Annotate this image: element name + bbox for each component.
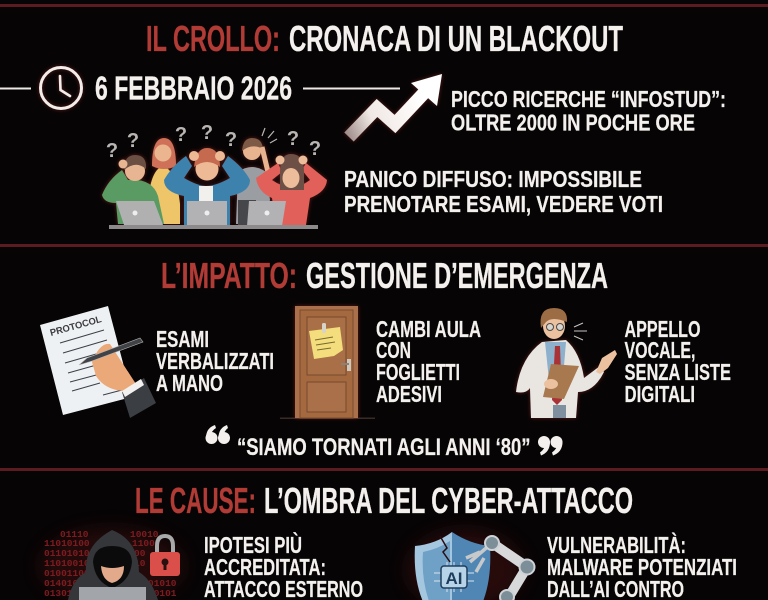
title: l'impatto: GESTIONE D’EMERGENZA — [306, 255, 608, 296]
icon: hacker with padlock: 10101 — [148, 588, 177, 599]
text: cambi aula — [376, 316, 481, 407]
question marks: ? — [175, 124, 187, 146]
icon: hacker with padlock: 01110 — [60, 529, 89, 540]
icon: AI shield and robotic arm — [407, 530, 534, 600]
icon: hacker with padlock: 11010010 — [44, 558, 90, 569]
question marks — [106, 122, 321, 162]
text: cambi aula: CON — [376, 337, 411, 363]
title: l'impatto — [161, 255, 608, 296]
icon: hacker with padlock: 01301010 — [44, 588, 90, 599]
text: vulnerabilita: VULNERABILITÀ: — [547, 531, 686, 558]
question marks: ? — [201, 122, 213, 144]
icon: hacker with padlock: 01401010 — [44, 578, 90, 589]
illustration: panicking students — [102, 122, 327, 229]
text: appello vocale — [624, 316, 731, 407]
icon: hacker with padlock: 00 — [134, 548, 146, 559]
date row with clock icon — [0, 68, 400, 108]
title: l'impatto: L’IMPATTO: — [161, 255, 297, 296]
text: panico diffuso — [344, 166, 663, 217]
text: esami verbalizzati: ESAMI — [156, 326, 209, 352]
icon: hacker with padlock: 10 — [134, 558, 146, 569]
text: picco ricerche: OLTRE 2000 IN POCHE ORE — [451, 110, 695, 136]
text: panico diffuso: PANICO DIFFUSO: IMPOSSIBILE — [344, 166, 642, 192]
text: esami verbalizzati: VERBALIZZATI — [156, 348, 274, 374]
text: picco ricerche — [451, 86, 726, 136]
icon: hacker with padlock: 01001100 — [44, 568, 90, 579]
question marks: ? — [287, 128, 299, 150]
text: appello vocale: APPELLO — [624, 316, 700, 342]
text: ipotesi: ACCREDITATA: — [204, 554, 326, 580]
question marks: ? — [225, 129, 237, 151]
icon: doctor calling the roll — [516, 308, 617, 418]
question marks: ? — [106, 140, 118, 162]
text: panico diffuso: PRENOTARE ESAMI, VEDERE VOTI — [344, 191, 663, 217]
icon: hacker with padlock: 1100 — [132, 538, 155, 549]
text: appello vocale: DIGITALI — [624, 381, 695, 407]
text: cambi aula: ADESIVI — [376, 381, 442, 407]
icon: AI shield and robotic arm: AI — [446, 569, 462, 588]
icon: hacker with padlock — [40, 528, 184, 600]
laptops and desk — [109, 201, 318, 229]
text: esami verbalizzati: A MANO — [156, 370, 223, 396]
text: esami verbalizzati — [156, 326, 274, 396]
text: vulnerabilita — [547, 531, 737, 600]
text: cambi aula: FOGLIETTI — [376, 359, 460, 385]
question marks: ? — [127, 130, 139, 152]
title: il crollo — [146, 18, 623, 59]
icon: hacker with padlock: 01101010 — [44, 548, 90, 559]
quote — [206, 425, 562, 461]
text: ipotesi — [204, 531, 363, 600]
text: ipotesi: IPOTESI PIÙ — [204, 531, 302, 558]
quote: “SIAMO TORNATI AGLI ANNI ‘80” — [237, 434, 530, 461]
text: cambi aula: CAMBI AULA — [376, 316, 481, 342]
icon: rising arrow — [349, 74, 442, 137]
icon: hacker with padlock: 11010100 — [44, 538, 90, 549]
text: appello vocale: VOCALE, — [624, 337, 696, 363]
title: il crollo: IL CROLLO: — [146, 18, 280, 59]
icon: handwritten protocol: PROTOCOL — [49, 314, 103, 339]
question marks: ? — [309, 138, 321, 160]
icon: handwritten protocol — [40, 306, 156, 418]
title: le cause: LE CAUSE: — [135, 480, 256, 521]
icon: hacker with padlock: 01010 — [148, 578, 177, 589]
icon: hacker with padlock: 10010 — [130, 529, 159, 540]
title: le cause — [135, 480, 633, 521]
icon: door with sticky note — [280, 306, 375, 419]
date row with clock icon: 6 FEBBRAIO 2026 — [95, 70, 292, 106]
